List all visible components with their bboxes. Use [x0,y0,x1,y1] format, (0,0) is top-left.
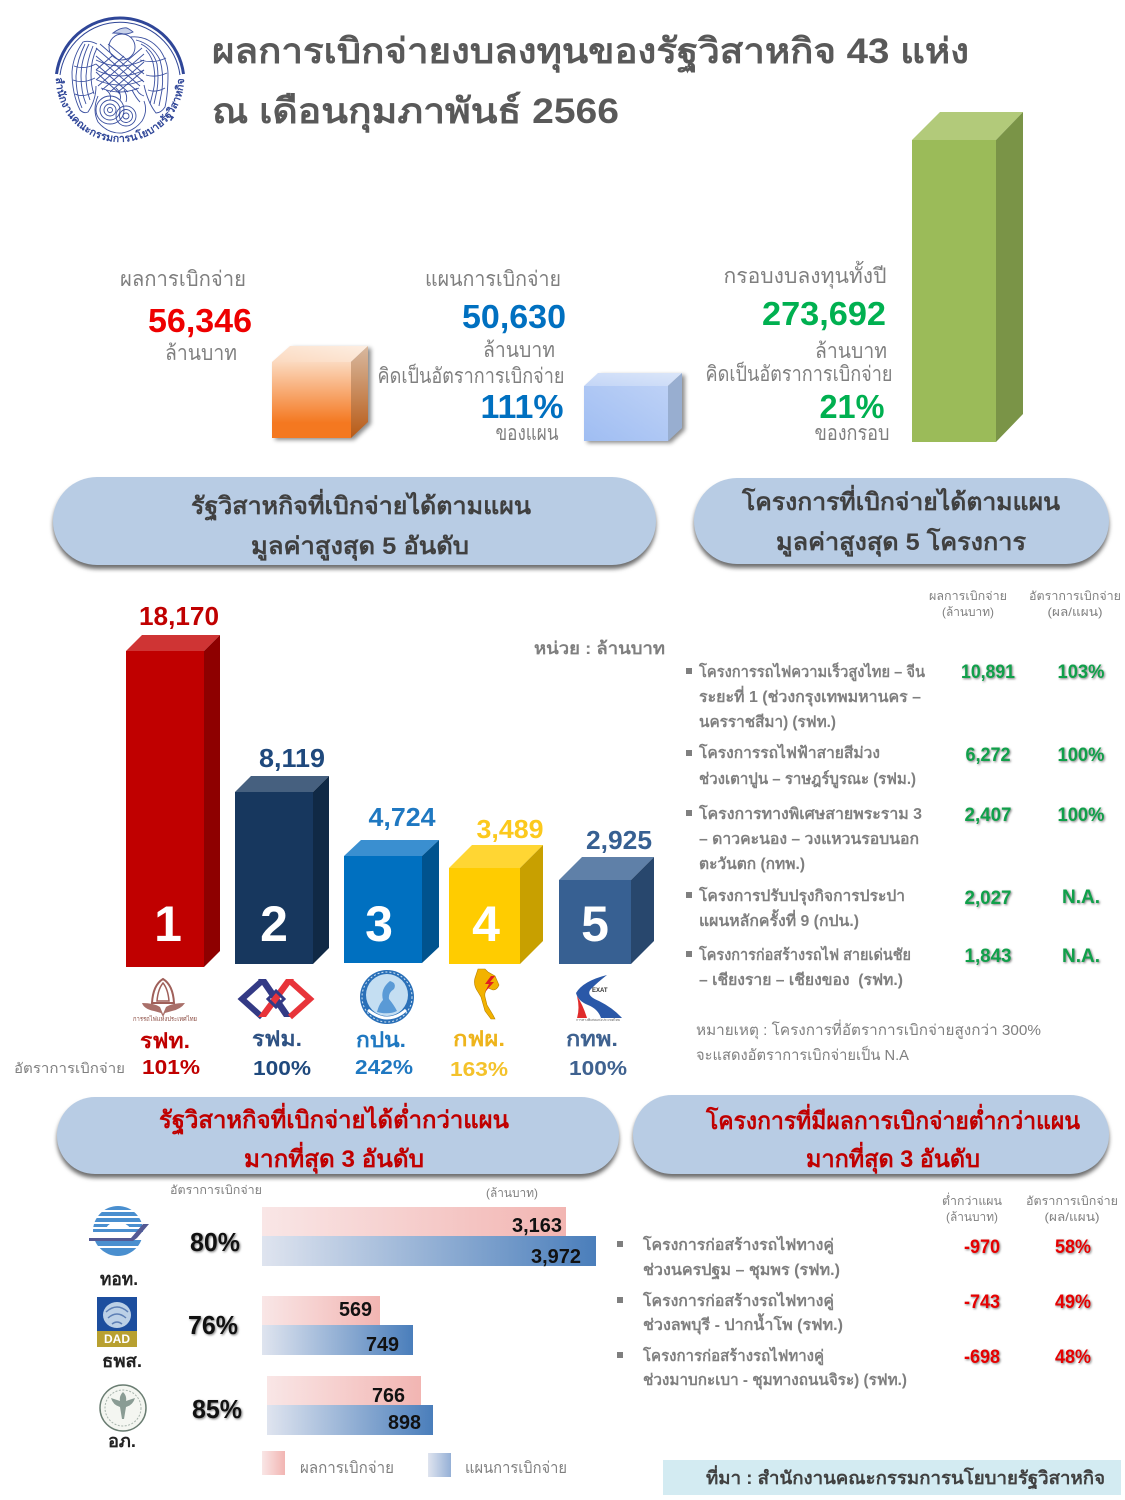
project list: below-plan projects: 48% [1055,1347,1091,1368]
bar 3: MWA: 3 [365,896,393,952]
stat: full-year investment budget: 21% [820,388,884,425]
heading: projects below plan: มากที่สุด 3 อันดับ [806,1141,980,1175]
rate and unit labels: (ล้านบาท) [486,1186,538,1200]
project list: top 5 projects: N.A. [1062,946,1100,967]
heading: enterprises meeting plan [53,477,656,565]
enterprise names and disbursement rates: 242% [355,1057,413,1079]
bar 5: EXAT: 2,925 [586,825,652,855]
project list: top 5 projects: 103% [1058,662,1105,683]
bars: AOT: 3,163 [512,1215,562,1237]
icon: SRT logo [133,979,197,1023]
icon: EXAT logo: EXAT [592,988,608,994]
heading: projects below plan: โครงการที่มีผลการเบิกจ่ายต่ำกว่าแผน [705,1103,1081,1135]
bar 4: EGAT: 3,489 [476,814,544,844]
rate and unit labels: อัตราการเบิกจ่าย [170,1183,262,1197]
enterprise names and disbursement rates: รฟท. [140,1030,190,1053]
bar 3: MWA: 4,724 [368,802,436,832]
project list: top 5 projects: – เชียงราย – เชียงของ (รฟท.) [699,971,903,989]
bars: DASTA [262,1296,413,1356]
label: AOT: ทอท. [100,1269,138,1289]
project list: below-plan projects: ช่วงลพบุรี - ปากน้ำโพ (รฟท.) [643,1313,843,1335]
project list: below-plan projects: ช่วงมาบกะเบา - ชุมทางถนนจิระ) (รฟท.) [643,1371,907,1390]
stat: disbursement result [120,268,252,365]
stat: disbursement plan: คิดเป็นอัตราการเบิกจ่าย [378,362,564,388]
logo: state enterprise policy office emblem [55,16,185,142]
project list: top 5 projects: 100% [1058,745,1105,766]
legend: ผลการเบิกจ่าย [300,1460,394,1477]
enterprise names and disbursement rates: 101% [142,1057,200,1079]
stat: disbursement result: ผลการเบิกจ่าย [120,268,246,291]
stat: disbursement plan [378,268,566,445]
icon: EXAT logo [576,975,622,1022]
project list: top 5 projects: 2,027 [964,888,1012,909]
project list: top 5 projects: ตะวันตก (กทพ.) [699,856,805,873]
bar 2: MRTA [235,743,329,964]
project list: below-plan projects: โครงการก่อสร้างรถไฟทางคู่ [642,1346,824,1367]
label: DASTA: ธพส. [102,1351,142,1371]
bar 1: SRT: 1 [154,896,182,952]
enterprise names and disbursement rates: รฟม. [252,1028,302,1051]
project list: below-plan projects: -970 [964,1237,1000,1258]
bar 5: EXAT: 5 [581,896,609,952]
project list: below-plan projects: โครงการก่อสร้างรถไฟทางคู่ [642,1291,834,1312]
stat: full-year investment budget: ของกรอบ [814,422,890,445]
table headers: top projects: (ผล/แผน) [1048,605,1102,619]
table headers: top projects: อัตราการเบิกจ่าย [1029,589,1121,603]
icon: MWA logo [360,970,414,1024]
heading: enterprises below plan: มากที่สุด 3 อันดับ [244,1141,424,1175]
stat: disbursement plan: แผนการเบิกจ่าย [425,268,561,291]
bar 1: SRT [126,601,220,967]
note: จะแสดงอัตราการเบิกจ่ายเป็น N.A [696,1045,909,1064]
table headers: below-plan projects: อัตราการเบิกจ่าย [1026,1194,1118,1208]
box: light blue 3D column [584,373,682,441]
stat: full-year investment budget [706,261,892,445]
project list: top 5 projects: 2,407 [964,805,1012,826]
heading: projects meeting plan: โครงการที่เบิกจ่ายได้ตามแผน [741,484,1061,516]
rate and unit labels [170,1183,538,1200]
stat: disbursement plan: ของแผน [496,422,558,445]
heading: enterprises below plan [57,1097,619,1175]
icon: MRTA logo [242,979,310,1017]
bar 2: MRTA: 8,119 [259,743,325,773]
bar 2: MRTA: 2 [260,896,288,952]
heading: projects below plan [633,1095,1109,1175]
stat: full-year investment budget: กรอบงบลงทุนทั้งปี [724,261,886,289]
legend [262,1451,567,1477]
bars: GPO: 766 [372,1385,405,1407]
enterprise names and disbursement rates: 100% [253,1058,311,1080]
icon: DASTA logo: DAD [104,1332,130,1346]
unit label: หน่วย : ล้านบาท [534,639,665,658]
note: หมายเหตุ : โครงการที่อัตราการเบิกจ่ายสูงกว่า 300% [696,1019,1041,1040]
box: green 3D column [912,112,1023,442]
head [113,28,133,34]
project list: top 5 projects: N.A. [1062,887,1100,908]
project list: top 5 projects: 1,843 [964,946,1012,967]
heading: enterprises below plan: รัฐวิสาหกิจที่เบิกจ่ายได้ต่ำกว่าแผน [159,1102,510,1136]
project list: below-plan projects: โครงการก่อสร้างรถไฟทางคู่ [642,1235,834,1256]
heading: projects meeting plan: มูลค่าสูงสุด 5 โครงการ [776,527,1026,558]
bars: DASTA: 749 [366,1334,399,1356]
table headers: top projects: ผลการเบิกจ่าย [929,589,1007,603]
bars: AOT: 3,972 [531,1246,581,1268]
project list: top 5 projects: โครงการปรับปรุงกิจการประปา [698,886,905,906]
table headers: top projects: (ล้านบาท) [942,605,994,619]
stat: disbursement result: 56,346 [148,302,252,339]
source box: ที่มา : สำนักงานคณะกรรมการนโยบายรัฐวิสาหกิจ [706,1465,1105,1490]
enterprise names and disbursement rates [14,1028,627,1081]
icon: EXAT logo: การทางพิเศษแห่งประเทศไทย [576,1017,620,1022]
enterprise names and disbursement rates: 163% [450,1059,508,1081]
enterprise names and disbursement rates: กทพ. [566,1028,618,1051]
project list: top 5 projects: 100% [1058,805,1105,826]
project list: below-plan projects: 49% [1055,1292,1091,1313]
right wing [130,37,168,113]
project list: top 5 projects: – ดาวคะนอง – วงแหวนรอบนอก [699,831,919,848]
table headers: below-plan projects: ต่ำกว่าแผน [942,1192,1002,1208]
project list: below-plan projects: ช่วงนครปฐม – ชุมพร (รฟท.) [643,1262,840,1280]
bar 4: EGAT: 4 [472,896,500,952]
stat: disbursement plan: 111% [480,388,564,425]
project list: top 5 projects: โครงการก่อสร้างรถไฟ สายเด่นชัย [698,945,911,964]
stat: full-year investment budget: คิดเป็นอัตราการเบิกจ่าย [706,360,892,386]
mesh [96,44,144,94]
project list: top 5 projects: นครราชสีมา) (รฟท.) [699,713,836,731]
rate: DASTA: 76% [188,1310,238,1340]
table headers: below-plan projects: (ผล/แผน) [1044,1210,1100,1224]
bars: AOT [262,1207,596,1268]
bars: DASTA: 569 [339,1299,372,1321]
table headers: below-plan projects [942,1192,1118,1224]
project list: top 5 projects: แผนหลักครั้งที่ 9 (กปน.) [699,909,859,930]
bar 3: MWA [344,802,439,963]
stat: disbursement plan: 50,630 [462,298,566,335]
stat: disbursement plan: ล้านบาท [483,339,555,362]
project list: below-plan projects: -743 [964,1292,1000,1313]
bar 1: SRT: 18,170 [139,601,219,631]
stat: full-year investment budget: ล้านบาท [815,340,887,363]
left wing [72,41,97,113]
icon: SRT logo: การรถไฟแห่งประเทศไทย [133,1015,197,1023]
swirl base [95,96,146,133]
project list: top 5 projects [686,661,1105,989]
heading: enterprises meeting plan: รัฐวิสาหกิจที่เบิกจ่ายได้ตามแผน [191,488,532,522]
bar chart: top 5 enterprises [126,601,654,967]
label: GPO: อภ. [108,1431,136,1451]
rate: AOT: 80% [190,1227,240,1257]
box: orange 3D column [272,346,368,438]
project list: top 5 projects: ระยะที่ 1 (ช่วงกรุงเทพมหานคร – [699,685,921,707]
icon: AOT logo [89,1206,149,1256]
project list: top 5 projects: โครงการรถไฟฟ้าสายสีม่วง [698,743,880,762]
title [212,32,969,133]
bars: GPO [267,1376,433,1435]
heading: projects meeting plan [694,478,1109,564]
enterprise names and disbursement rates: กฟผ. [453,1028,505,1051]
enterprise names and disbursement rates: อัตราการเบิกจ่าย [14,1060,125,1076]
icon: DASTA logo [97,1297,137,1347]
stat: disbursement result: ล้านบาท [165,342,237,365]
icon: EGAT logo [474,969,499,1019]
project list: top 5 projects: โครงการรถไฟความเร็วสูงไทย – จีน [698,661,925,683]
project list: top 5 projects: ช่วงเตาปูน – ราษฎร์บูรณะ (รฟม.) [699,770,916,790]
project list: top 5 projects: โครงการทางพิเศษสายพระราม 3 [698,804,922,823]
enterprise names and disbursement rates: กปน. [356,1029,406,1052]
project list: below-plan projects: 58% [1055,1237,1091,1258]
logo: state enterprise policy office emblem: สำนักงานคณะกรรมการนโยบายรัฐวิสาหกิจ [56,78,184,142]
legend: แผนการเบิกจ่าย [465,1460,567,1477]
title: ณ เดือนกุมภาพันธ์ 2566 [212,91,619,133]
enterprise names and disbursement rates: 100% [569,1058,627,1080]
bar 4: EGAT [449,814,544,964]
source box [663,1460,1121,1495]
heading: enterprises meeting plan: มูลค่าสูงสุด 5 อันดับ [251,533,469,562]
bar 5: EXAT [559,825,654,964]
bars: GPO: 898 [388,1412,421,1434]
project list: below-plan projects: -698 [964,1347,1000,1368]
table headers: below-plan projects: (ล้านบาท) [946,1210,998,1224]
project list: top 5 projects: 6,272 [966,745,1010,766]
icon: GPO logo [100,1385,146,1431]
project list: top 5 projects: 10,891 [961,662,1015,683]
note [696,1019,1041,1064]
rate: GPO: 85% [192,1394,242,1424]
title: ผลการเบิกจ่ายงบลงทุนของรัฐวิสาหกิจ 43 แห่ง [212,32,969,74]
table headers: top projects [929,589,1121,619]
stat: full-year investment budget: 273,692 [762,295,886,332]
project list: below-plan projects [617,1235,1091,1390]
